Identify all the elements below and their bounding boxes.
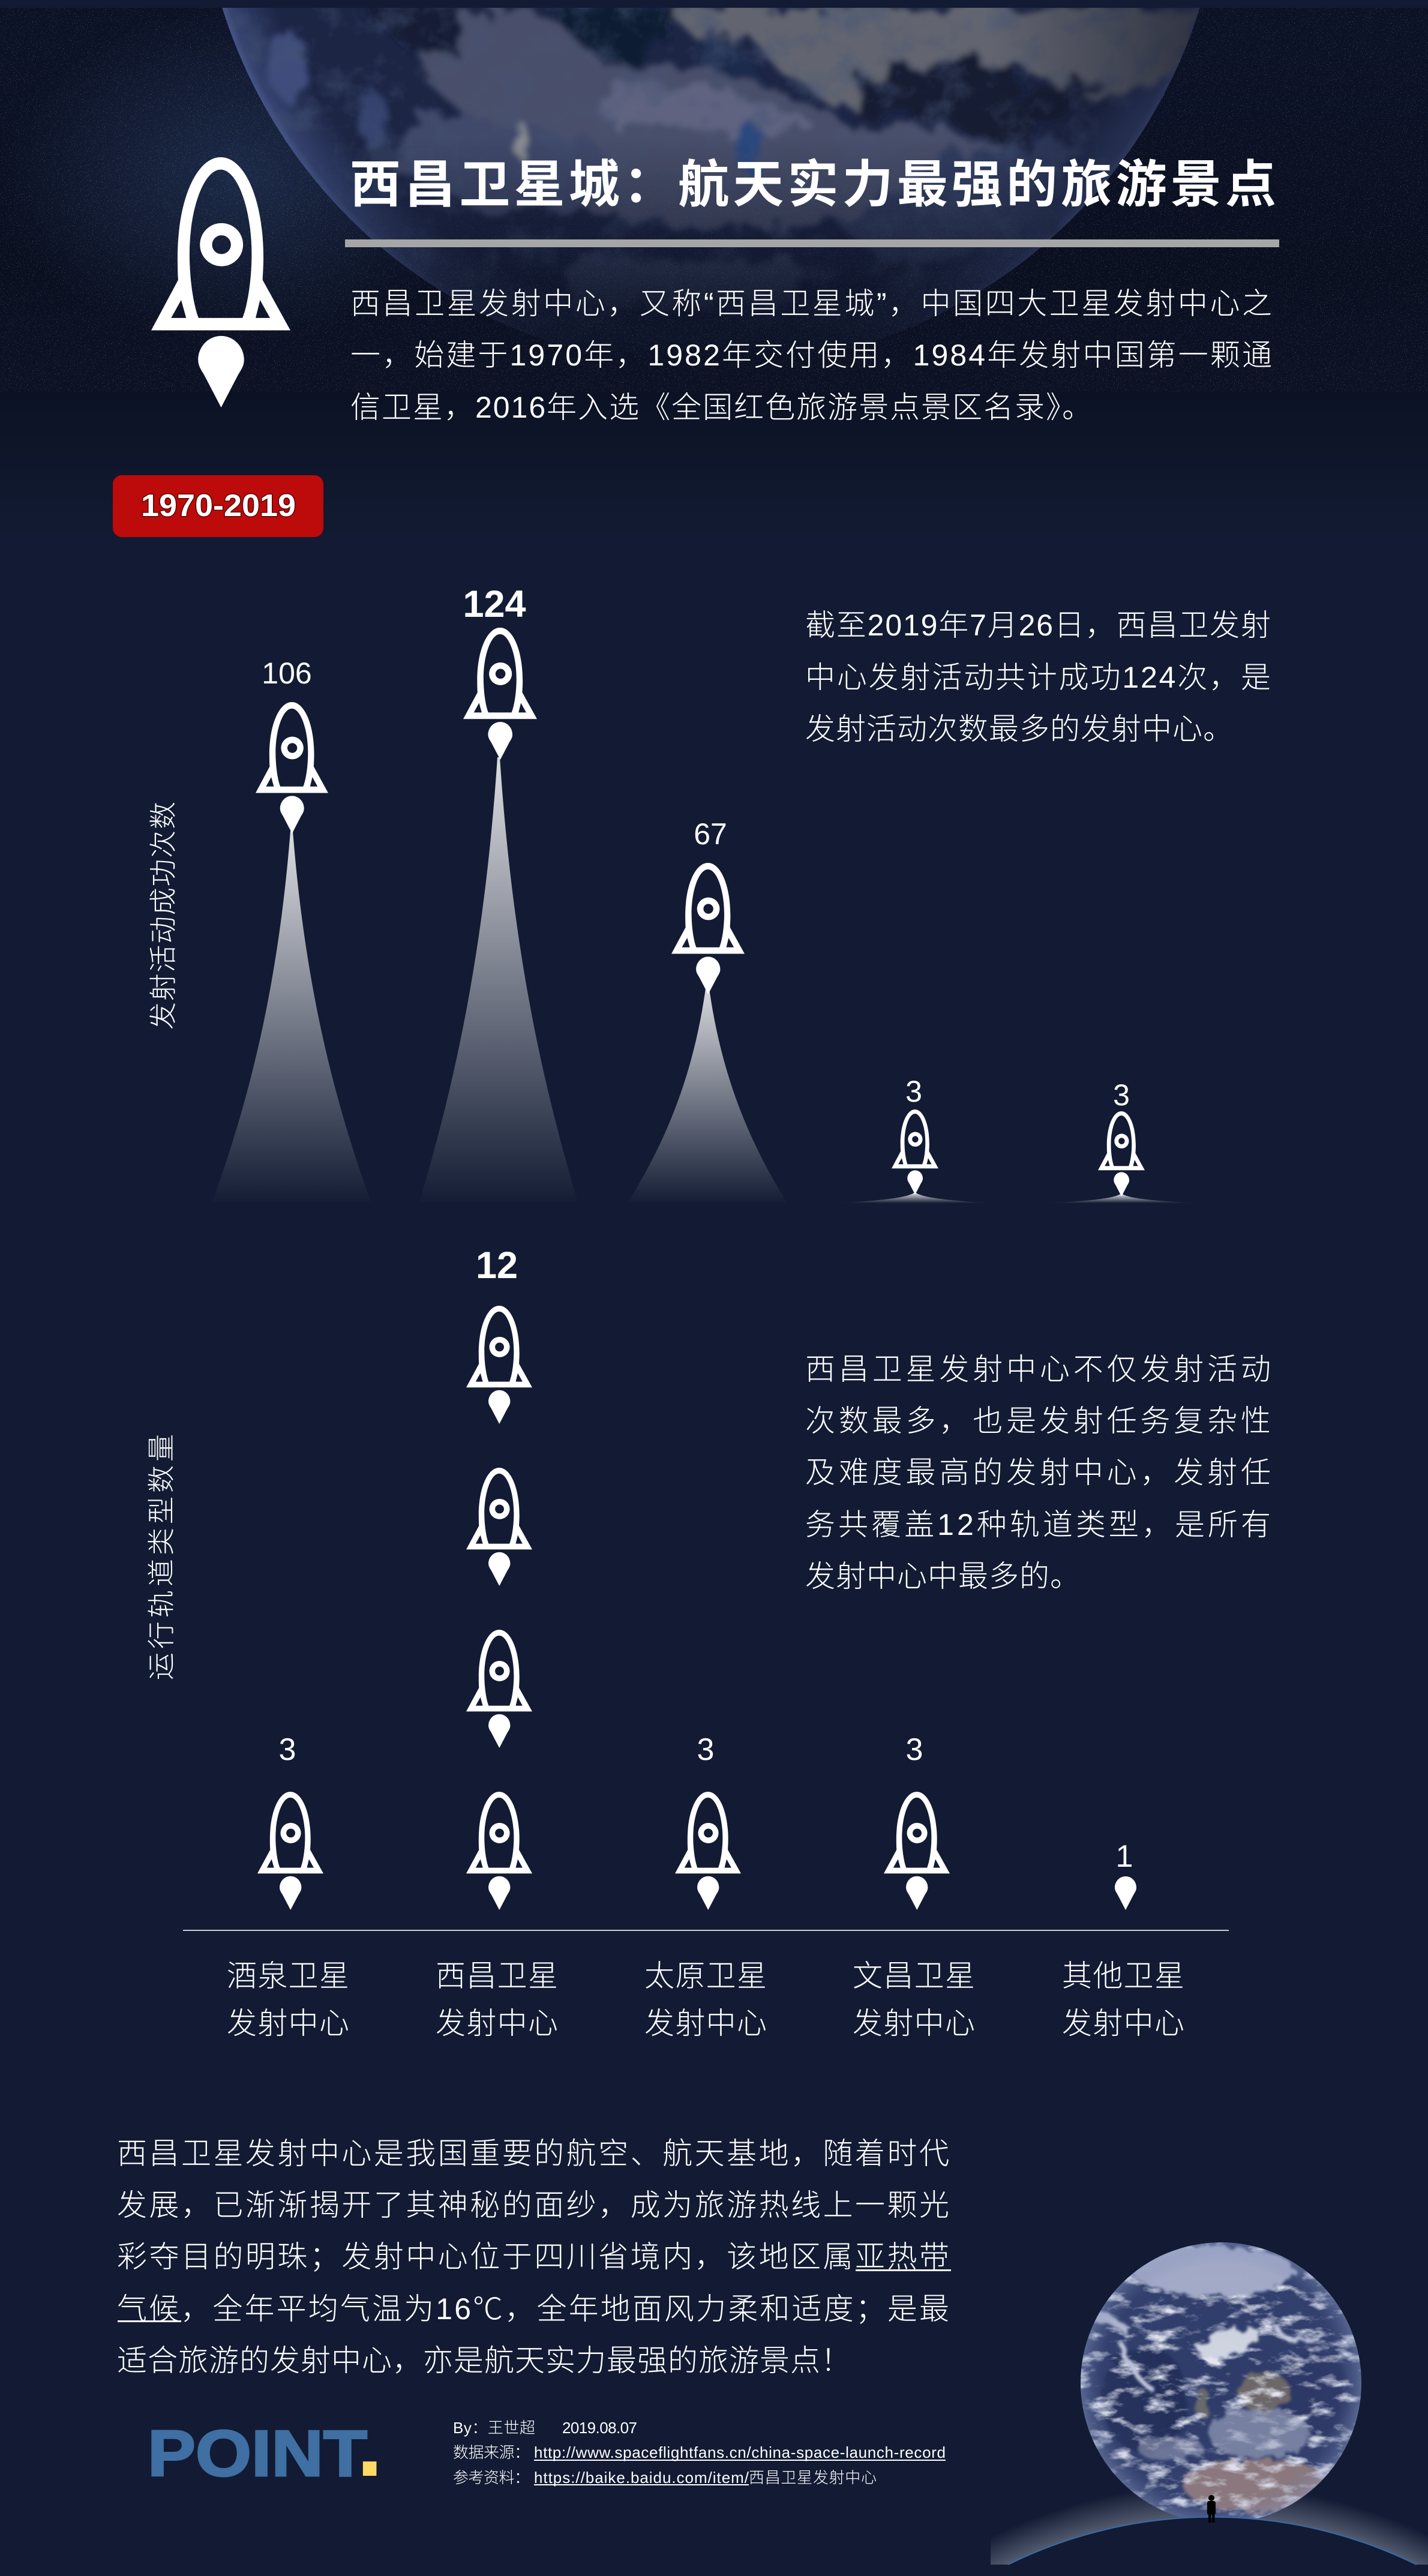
closing paragraph <box>117 2137 951 2377</box>
plume: Xichang <box>419 757 578 1202</box>
credits: https://baike.baidu.com/item/ <box>534 2469 749 2487</box>
intro paragraph: 一，始建于1970年，1982年交付使用，1984年发射中国第一颗通 <box>350 338 1272 372</box>
logo <box>148 2389 383 2496</box>
credits: 数据来源： <box>453 2443 530 2461</box>
value 3: 3 <box>1113 1078 1130 1112</box>
rocket: Jiuquan <box>257 1792 323 1910</box>
rocket: other 3 <box>1098 1111 1145 1196</box>
intro paragraph: 西昌卫星发射中心，又称“西昌卫星城”，中国四大卫星发射中心之 <box>350 287 1272 320</box>
rocket: Xichang 124 <box>463 628 537 760</box>
category labels: 发射中心 <box>853 2007 975 2040</box>
horizon planet <box>1008 2517 1417 2565</box>
intro paragraph: 信卫星，2016年入选《全国红色旅游景点景区名录》。 <box>350 391 1092 424</box>
category labels <box>227 1959 1184 2040</box>
value 106: 106 <box>262 656 312 690</box>
plume: Jiuquan <box>212 831 371 1202</box>
credits: 2019.08.07 <box>562 2419 637 2437</box>
category labels: 发射中心 <box>436 2007 558 2040</box>
credits <box>453 2419 946 2487</box>
note: orbit types <box>805 1353 1271 1593</box>
note: launch count <box>805 608 1271 746</box>
category labels: 文昌卫星 <box>853 1959 975 1993</box>
illustration: earth and person on horizon <box>991 2242 1428 2565</box>
closing paragraph: 气候，全年平均气温为16℃，全年地面风力柔和适度；是最 <box>117 2292 949 2326</box>
value 3: 3 <box>905 1075 922 1108</box>
credits: By：王世超 <box>453 2419 535 2437</box>
plume: other <box>1047 1194 1196 1203</box>
category labels: 其他卫星 <box>1062 1959 1184 1993</box>
period badge <box>113 475 323 537</box>
plume: Taiyuan <box>628 984 787 1203</box>
closing paragraph: 彩夺目的明珠；发射中心位于四川省境内，该地区属亚热带 <box>117 2240 949 2274</box>
note: orbit types: 次数最多，也是发射任务复杂性 <box>805 1404 1271 1438</box>
rocket: Taiyuan <box>675 1792 741 1910</box>
credits: http://www.spaceflightfans.cn/china-space-launch-record <box>534 2443 946 2461</box>
rocket: Wenchang <box>884 1792 950 1910</box>
rocket: Jiuquan 106 <box>256 702 328 833</box>
person silhouette <box>1207 2495 1216 2523</box>
note: orbit types: 西昌卫星发射中心不仅发射活动 <box>805 1353 1271 1386</box>
category labels: 发射中心 <box>644 2007 767 2040</box>
note: launch count: 截至2019年7月26日，西昌卫发射 <box>805 608 1271 642</box>
rocket stack: Xichang <box>466 1306 532 1910</box>
value 3 Taiyuan: 3 <box>697 1732 714 1767</box>
note: orbit types: 及难度最高的发射中心，发射任 <box>805 1456 1271 1489</box>
value 3 Wenchang: 3 <box>906 1732 923 1767</box>
flame: other <box>1115 1876 1136 1910</box>
value 67: 67 <box>694 817 727 851</box>
chart: successful launches <box>212 583 1196 1203</box>
value 3 Jiuquan: 3 <box>279 1732 296 1767</box>
value 1 other: 1 <box>1116 1839 1133 1874</box>
title: 西昌卫星城：航天实力最强的旅游景点 <box>350 157 1276 214</box>
closing paragraph: 西昌卫星发射中心是我国重要的航空、航天基地，随着时代 <box>117 2137 949 2170</box>
note: orbit types: 发射中心中最多的。 <box>805 1560 1081 1593</box>
earth <box>1081 2242 1361 2523</box>
category labels: 西昌卫星 <box>436 1959 558 1993</box>
y-axis label: orbit types: 运行轨道类型数量 <box>146 1434 177 1680</box>
value 124: 124 <box>463 583 526 625</box>
value 12: 12 <box>476 1244 518 1286</box>
intro paragraph <box>350 287 1272 424</box>
header background: space with earth <box>0 8 1428 460</box>
chart: orbit types <box>257 1244 1136 1910</box>
logo: POINT <box>148 2417 367 2490</box>
note: orbit types: 务共覆盖12种轨道类型，是所有 <box>805 1508 1271 1542</box>
note: launch count: 中心发射活动共计成功124次，是 <box>805 661 1271 694</box>
horizon rim line <box>1008 2517 1417 2565</box>
category labels: 太原卫星 <box>644 1959 767 1993</box>
rocket: Wenchang 3 <box>892 1109 938 1195</box>
horizon glow <box>991 2460 1428 2565</box>
plume: Wenchang <box>841 1193 989 1203</box>
credits: 西昌卫星发射中心 <box>749 2469 877 2487</box>
closing paragraph: 发展，已渐渐揭开了其神秘的面纱，成为旅游热线上一颗光 <box>117 2188 949 2222</box>
category labels: 发射中心 <box>1062 2007 1184 2040</box>
axis line <box>183 1930 1229 1931</box>
y-axis label: launches: 发射活动成功次数 <box>148 802 179 1030</box>
header rocket icon <box>151 157 290 407</box>
rocket: Taiyuan 67 <box>671 863 745 994</box>
closing paragraph: 适合旅游的发射中心，亦是航天实力最强的旅游景点！ <box>117 2344 851 2377</box>
category labels: 发射中心 <box>227 2007 349 2040</box>
period badge: 1970-2019 <box>141 488 296 523</box>
logo: . <box>356 2389 383 2496</box>
note: launch count: 发射活动次数最多的发射中心。 <box>805 712 1234 746</box>
credits: 参考资料： <box>453 2469 530 2487</box>
top strip <box>0 0 1428 8</box>
title divider bar <box>345 239 1279 247</box>
category labels: 酒泉卫星 <box>227 1959 349 1993</box>
